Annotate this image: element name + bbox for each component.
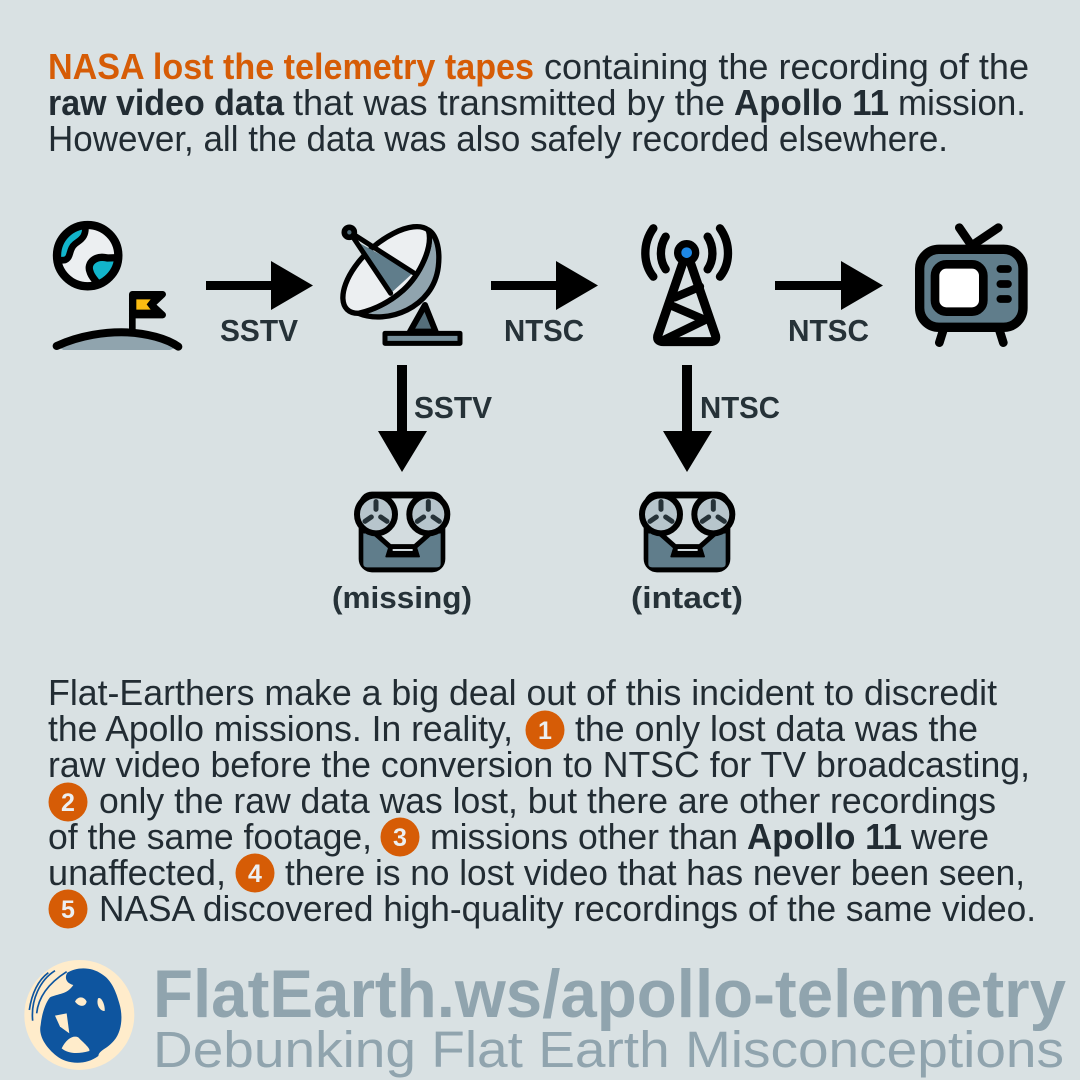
label: (missing): (missing) bbox=[332, 580, 472, 615]
icon: broadcast tower bbox=[645, 228, 728, 342]
body text block: only the raw data was lost, but there are other recordings bbox=[99, 780, 996, 821]
label: (intact): (intact) bbox=[631, 580, 743, 615]
icon: satellite dish bbox=[343, 227, 460, 343]
footer url: FlatEarth.ws/apollo-telemetry bbox=[153, 956, 1066, 1032]
badge 5 bbox=[48, 890, 88, 928]
label: NTSC: NTSC bbox=[504, 313, 584, 348]
arrow: tower to intact tape bbox=[663, 365, 712, 472]
footer tagline: Debunking Flat Earth Misconceptions bbox=[153, 1021, 1064, 1078]
arrow: dish to tower bbox=[491, 261, 598, 310]
body text block: missions other than bbox=[430, 816, 738, 857]
badge 3 bbox=[380, 818, 420, 856]
badge 1: 1 bbox=[538, 717, 552, 745]
badge 4 bbox=[236, 854, 274, 892]
body text block: unaffected, bbox=[48, 852, 226, 893]
label: SSTV: SSTV bbox=[220, 313, 298, 348]
body text block: the Apollo missions. In reality, bbox=[48, 708, 513, 749]
icon: moon, earth and flag bbox=[47, 217, 178, 350]
body text block: Apollo 11 bbox=[747, 816, 902, 857]
label: NTSC: NTSC bbox=[788, 313, 869, 348]
body text block: of the same footage, bbox=[48, 816, 372, 857]
arrow: tower to tv bbox=[775, 261, 883, 310]
icon: television bbox=[920, 228, 1023, 343]
intro text block: However, all the data was also safely recorded elsewhere. bbox=[48, 118, 948, 159]
badge 4: 4 bbox=[248, 860, 262, 888]
badge 1 bbox=[526, 710, 564, 750]
arrow: moon to dish bbox=[206, 261, 313, 310]
body text block bbox=[48, 672, 1036, 929]
badge 2 bbox=[48, 782, 88, 822]
body text block: there is no lost video that has never been seen, bbox=[285, 852, 1025, 893]
intro text block: Apollo 11 bbox=[734, 82, 889, 123]
body text block: raw video before the conversion to NTSC for TV broadcasting, bbox=[48, 744, 1030, 785]
logo: flat earth globe bbox=[24, 960, 134, 1070]
intro text block: that was transmitted by the bbox=[293, 82, 725, 123]
intro text block bbox=[48, 46, 1029, 159]
icon: missing tape reel bbox=[357, 495, 447, 569]
badge 3: 3 bbox=[393, 824, 407, 852]
body text block: Flat-Earthers make a big deal out of this incident to discredit bbox=[48, 672, 997, 713]
intro text block: containing the recording of the bbox=[544, 46, 1029, 87]
badge 2: 2 bbox=[61, 789, 75, 817]
icon: intact tape reel bbox=[642, 495, 732, 569]
body text block: were bbox=[910, 816, 989, 857]
body text block: the only lost data was the bbox=[575, 708, 978, 749]
intro text block: mission. bbox=[898, 82, 1026, 123]
intro text block: NASA lost the telemetry tapes bbox=[48, 46, 534, 87]
label: SSTV: SSTV bbox=[414, 390, 492, 425]
intro text block: raw video data bbox=[48, 82, 285, 123]
label: NTSC: NTSC bbox=[700, 390, 780, 425]
badge 5: 5 bbox=[61, 896, 75, 924]
arrow: dish to missing tape bbox=[378, 365, 427, 472]
body text block: NASA discovered high-quality recordings of the same video. bbox=[99, 888, 1036, 929]
